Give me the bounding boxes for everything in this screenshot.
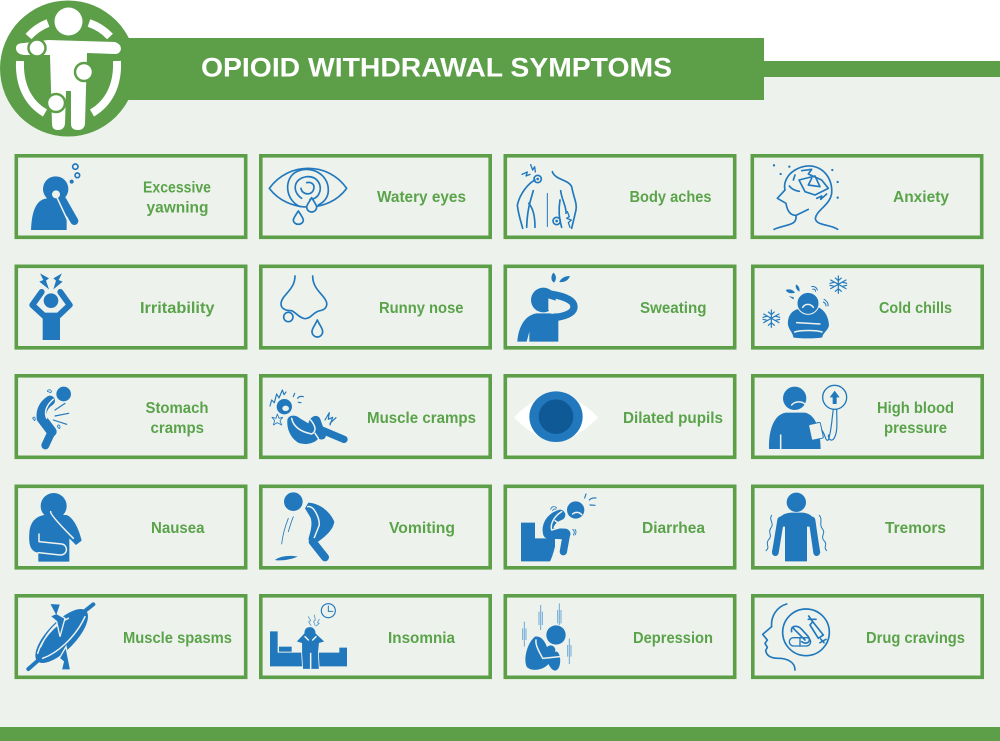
panel: depression <box>505 596 735 677</box>
label: Nausea <box>151 520 205 537</box>
icon: nauseous person <box>29 493 82 562</box>
panel: watery eyes <box>261 156 490 237</box>
icon: watery eye <box>269 168 347 224</box>
icon: leg cramp <box>270 390 344 444</box>
label: Anxiety <box>893 189 949 206</box>
label: Body aches <box>630 189 712 206</box>
panel: muscle cramps <box>261 376 490 457</box>
label: Insomnia <box>388 630 455 647</box>
icon: back pain <box>517 165 576 228</box>
panel: stomach cramps <box>16 376 246 457</box>
icon: shivering person <box>763 276 847 338</box>
panel: irritability <box>16 266 246 348</box>
label: Tremors <box>885 520 946 537</box>
panel: tremors <box>753 486 982 568</box>
icon: anxious head <box>773 164 839 229</box>
icon: sleepless in bed <box>270 604 347 669</box>
icon: vomiting person <box>275 492 334 560</box>
panel: insomnia <box>261 596 490 677</box>
icon: sweating person <box>517 273 574 342</box>
icon: stomach pain <box>33 387 71 445</box>
icon: yawning <box>31 164 80 230</box>
label: Muscle cramps <box>367 410 476 427</box>
label: Dilated pupils <box>623 410 723 427</box>
label: Stomach <box>146 400 208 417</box>
icon: dilated pupil <box>514 391 598 442</box>
panel: excessive yawning <box>16 156 246 237</box>
label: Sweating <box>640 300 706 317</box>
icon: runny nose <box>281 276 327 337</box>
footer band <box>0 727 1000 741</box>
header line <box>764 61 1000 77</box>
panel: drug cravings <box>753 596 982 677</box>
icon: muscle spasm <box>27 601 96 671</box>
label: Vomiting <box>389 520 455 537</box>
panel: vomiting <box>261 486 490 568</box>
icon: person on toilet <box>521 494 596 561</box>
icon: craving head <box>763 604 829 670</box>
panel: cold chills <box>753 266 982 348</box>
panel: body aches <box>505 156 735 237</box>
label line 2: yawning <box>146 200 208 216</box>
icon: blood pressure <box>769 385 847 449</box>
icon: depressed person <box>523 603 571 671</box>
label: Excessive <box>143 180 211 196</box>
icon: body with pain points <box>0 0 136 136</box>
label: Depression <box>633 630 713 647</box>
panel: dilated pupils <box>505 376 735 457</box>
label: Drug cravings <box>866 630 965 647</box>
title: OPIOID WITHDRAWAL SYMPTOMS <box>201 52 672 82</box>
icon: irritated person <box>32 273 70 340</box>
label: Muscle spasms <box>123 630 232 647</box>
panel: anxiety <box>752 156 982 237</box>
panel: muscle spasms <box>16 596 246 677</box>
panel: sweating <box>505 266 735 348</box>
label: Runny nose <box>379 300 464 317</box>
label: Cold chills <box>879 300 952 317</box>
icon: trembling person <box>766 493 827 561</box>
label: High blood <box>877 400 954 417</box>
label: Irritability <box>140 300 215 317</box>
panel: nausea <box>16 486 246 568</box>
label: Watery eyes <box>377 189 466 206</box>
panel: high blood pressure <box>753 376 982 457</box>
panel: runny nose <box>261 266 490 348</box>
label: Diarrhea <box>642 520 705 537</box>
header banner <box>100 38 764 100</box>
label line 2: cramps <box>150 420 204 437</box>
label line 2: pressure <box>884 420 947 437</box>
panel: diarrhea <box>505 486 735 568</box>
